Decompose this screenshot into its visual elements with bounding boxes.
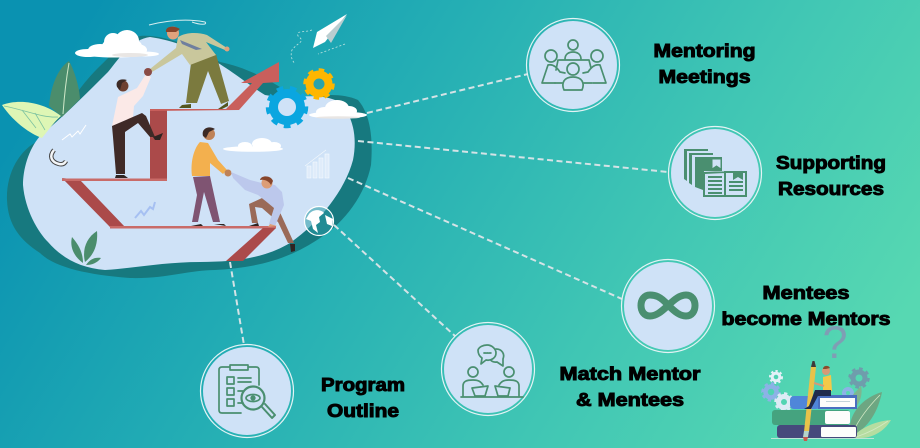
icon: blue gear — [268, 88, 306, 126]
icon: paper plane — [291, 14, 347, 64]
person: man in orange sweater — [191, 127, 232, 226]
illustration: books and reader — [762, 317, 891, 441]
node: supporting resources — [668, 126, 762, 220]
person: man climbing — [112, 68, 163, 178]
red staircase arrow — [62, 62, 279, 261]
node: match mentor and mentees — [442, 322, 534, 416]
label: supporting resources: Resources — [778, 179, 884, 199]
label: mentoring meetings: Meetings — [658, 67, 750, 87]
cloud: top left — [75, 30, 159, 58]
bottom diagonal — [226, 228, 276, 261]
blob shadow — [7, 36, 372, 278]
icon: infinity loop — [641, 295, 695, 316]
label: match mentor and mentees: Match Mentor — [560, 364, 700, 384]
label: program outline: Outline — [327, 401, 399, 421]
pencil — [804, 366, 816, 432]
node: program outline — [200, 344, 294, 438]
leaf: pale green — [2, 102, 61, 138]
icon: yellow gear — [305, 70, 333, 98]
label: mentoring meetings — [654, 41, 756, 87]
blob main — [23, 37, 355, 270]
person: man in blue sweater pulling — [231, 172, 295, 252]
leaves — [850, 386, 862, 410]
leaf: dark green — [49, 61, 80, 117]
label: mentees become mentors: Mentees — [762, 283, 850, 303]
leaf: bottom sprout — [71, 231, 101, 265]
node: mentees become mentors — [622, 260, 714, 352]
middle book — [772, 410, 850, 425]
bottom book — [777, 425, 857, 438]
icon: small outlined gear — [51, 150, 66, 164]
node: mentoring meetings — [526, 18, 620, 112]
label: program outline — [321, 375, 405, 421]
cloud: middle — [223, 138, 283, 152]
upper vertical post — [150, 110, 167, 180]
icon: two people talking at laptops — [461, 345, 523, 397]
upper step and arrow — [150, 62, 279, 111]
reader — [823, 375, 832, 391]
icon: people around a table — [542, 40, 606, 90]
label: match mentor and mentees — [560, 364, 700, 410]
ground line — [771, 438, 874, 439]
dashed connectors — [230, 74, 668, 345]
label: mentees become mentors — [722, 283, 890, 329]
middle step — [62, 178, 125, 227]
cloud: right — [309, 100, 367, 119]
small gears — [762, 368, 868, 410]
label: match mentor and mentees: & Mentees — [576, 390, 684, 410]
icon: small bar chart — [305, 150, 329, 178]
label: program outline: Program — [321, 375, 405, 395]
label: supporting resources: Supporting — [776, 153, 886, 173]
label: supporting resources — [776, 153, 886, 199]
bottom step — [110, 226, 276, 228]
person: top man reaching down — [150, 26, 230, 109]
icon: globe — [304, 206, 334, 236]
icon: books — [684, 149, 746, 196]
label: mentoring meetings: Mentoring — [654, 41, 756, 61]
swoosh lines above man — [149, 20, 206, 25]
icon: clipboard with magnifier — [219, 365, 275, 418]
label: mentees become mentors: become Mentors — [722, 309, 890, 329]
icon: white squiggle arrow — [62, 125, 86, 140]
icon: blue squiggle — [135, 202, 155, 218]
top book — [790, 396, 820, 409]
question mark: ? — [822, 317, 848, 368]
